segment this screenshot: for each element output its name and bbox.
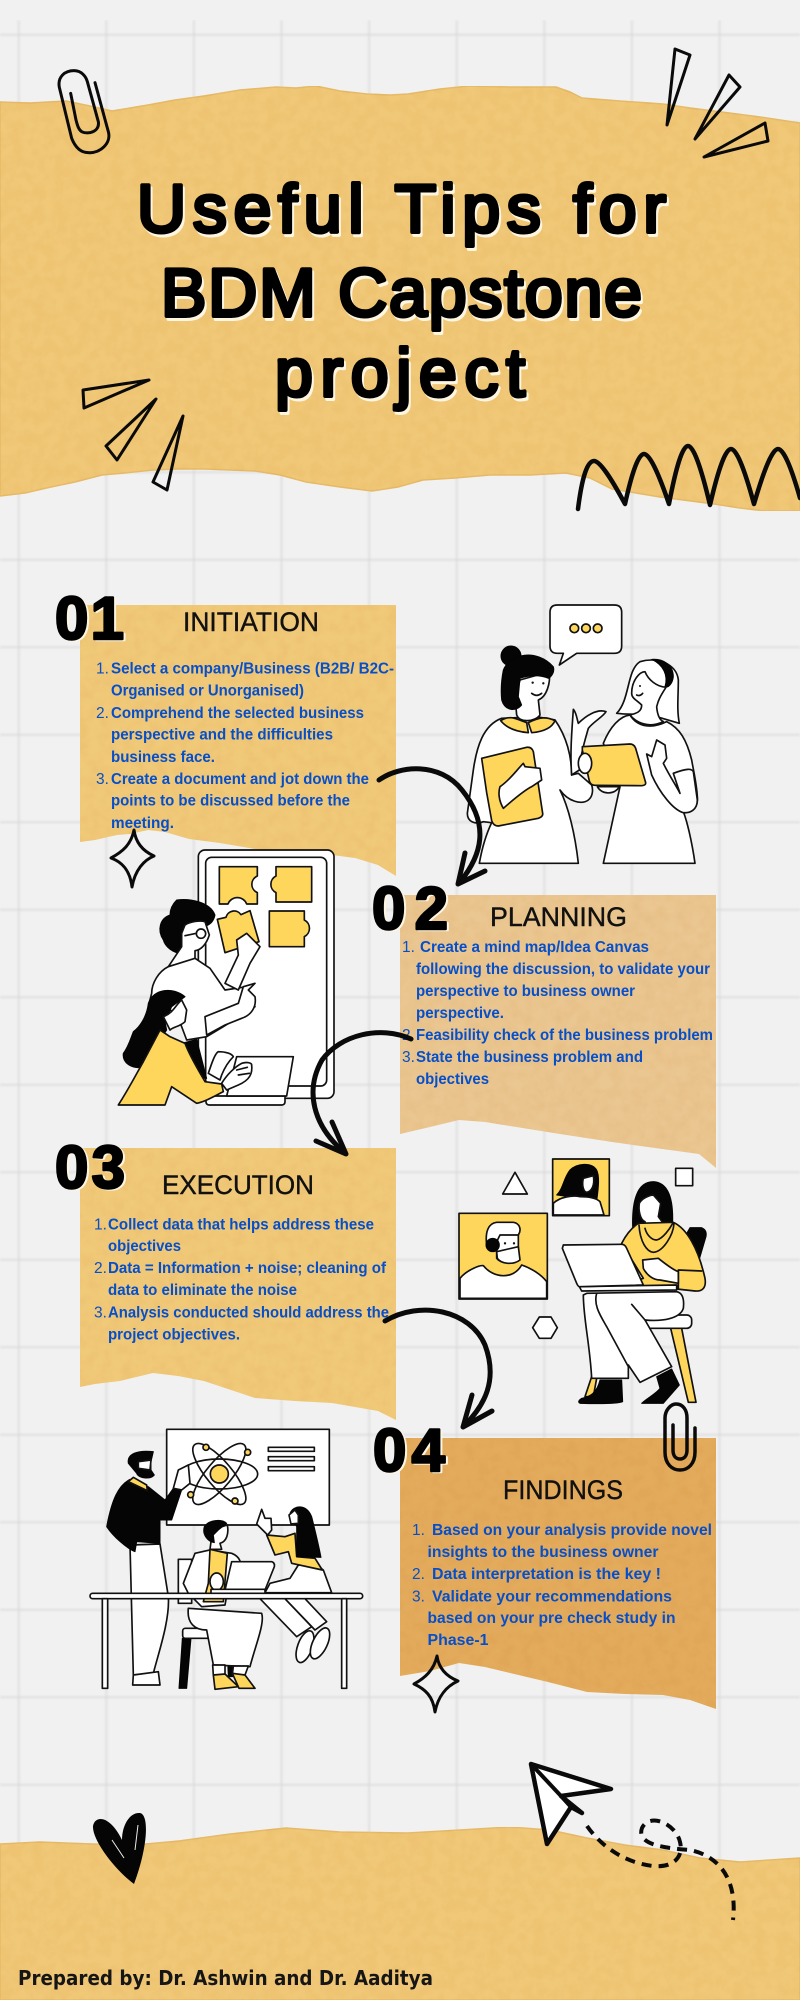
step list: findings: insights to the business owner bbox=[428, 1544, 658, 1561]
title: BDM Capstone bbox=[161, 255, 642, 331]
illustration: woman on video call bbox=[459, 1159, 706, 1404]
panel: 01 initiation bbox=[80, 605, 396, 876]
illustration: team solving puzzle board bbox=[118, 850, 334, 1105]
step list: execution: 2. bbox=[94, 1260, 107, 1277]
step list: execution: Collect data that helps address these bbox=[108, 1216, 374, 1233]
step list: initiation: 1. bbox=[96, 661, 109, 678]
top torn paper banner bbox=[0, 86, 800, 511]
step list: findings: based on your pre check study in bbox=[428, 1610, 676, 1627]
step list: initiation bbox=[96, 661, 394, 832]
step list: execution: 3. bbox=[94, 1304, 107, 1322]
step list: planning: 2. bbox=[402, 1027, 415, 1044]
icon: spikes left bbox=[83, 380, 183, 490]
step list: findings bbox=[412, 1522, 712, 1649]
step list: execution: 1. bbox=[94, 1216, 107, 1233]
step list: planning bbox=[402, 939, 713, 1088]
panel: 03 execution bbox=[80, 1148, 396, 1420]
step list: planning: perspective to business owner bbox=[416, 983, 635, 1000]
heading: initiation: INITIATION bbox=[183, 607, 319, 637]
arrow: initiation to planning bbox=[379, 769, 485, 884]
step list: execution: Analysis conducted should address the bbox=[108, 1304, 389, 1322]
step list: findings: 2. bbox=[412, 1566, 425, 1583]
panel: 02 planning bbox=[400, 895, 716, 1168]
step list: initiation: Comprehend the selected business bbox=[111, 705, 364, 722]
icon: spikes top right bbox=[667, 49, 768, 157]
icon: paper clip top left bbox=[59, 71, 109, 153]
step list: execution: project objectives. bbox=[108, 1326, 240, 1343]
step list: initiation: Create a document and jot down the bbox=[111, 771, 369, 788]
footer credit: Prepared by: Dr. Ashwin and Dr. Aaditya bbox=[18, 1966, 433, 1990]
step list: findings: 3. bbox=[412, 1588, 425, 1606]
step list: planning: 3. bbox=[402, 1049, 415, 1066]
number 02: 02 bbox=[372, 875, 448, 942]
title bbox=[137, 171, 666, 411]
step list: initiation: Organised or Unorganised) bbox=[111, 683, 304, 700]
step list: initiation: 3. bbox=[96, 771, 109, 788]
heading: planning: PLANNING bbox=[490, 902, 627, 932]
step list: execution: objectives bbox=[108, 1238, 181, 1255]
icon: zigzag squiggle bbox=[578, 446, 800, 509]
arrow: planning to execution bbox=[313, 1033, 411, 1154]
step list: findings: 1. bbox=[412, 1522, 425, 1539]
step list: execution: Data = Information + noise; cleaning of bbox=[108, 1260, 387, 1277]
step list: planning: Feasibility check of the business problem bbox=[416, 1027, 713, 1044]
icon: paper plane bbox=[531, 1764, 611, 1844]
number 03: 03 bbox=[55, 1134, 125, 1201]
number 01: 01 bbox=[55, 585, 124, 652]
step list: findings: Validate your recommendations bbox=[432, 1588, 672, 1606]
icon: dashed flight path bbox=[587, 1821, 734, 1920]
step list: findings: Phase-1 bbox=[428, 1632, 489, 1649]
step list: initiation: perspective and the difficulties bbox=[111, 727, 333, 744]
step list: planning: 1. bbox=[402, 939, 415, 956]
step list: findings: Based on your analysis provide novel bbox=[432, 1522, 712, 1539]
icon: sparkle lower bbox=[414, 1656, 458, 1712]
step list: initiation: meeting. bbox=[111, 815, 174, 832]
step list: initiation: 2. bbox=[96, 705, 109, 722]
title: project bbox=[275, 335, 525, 411]
step list: planning: perspective. bbox=[416, 1005, 504, 1022]
step list: planning: objectives bbox=[416, 1071, 489, 1088]
number 04: 04 bbox=[373, 1417, 446, 1484]
step list: planning: following the discussion, to validate your bbox=[416, 961, 710, 978]
icon: paper clip right bbox=[665, 1404, 695, 1470]
step list: initiation: points to be discussed before the bbox=[111, 793, 350, 810]
step list: execution bbox=[94, 1216, 389, 1343]
step list: findings: Data interpretation is the key ! bbox=[432, 1566, 661, 1583]
icon: sparkle bbox=[111, 830, 154, 887]
step list: initiation: business face. bbox=[111, 749, 215, 766]
illustration: two women talking bbox=[467, 605, 697, 863]
illustration: team at table with atom board bbox=[90, 1429, 363, 1689]
bottom torn paper banner bbox=[0, 1827, 800, 2000]
step list: planning: Create a mind map/Idea Canvas bbox=[420, 939, 649, 956]
title: Useful Tips for bbox=[137, 171, 666, 247]
heading: execution: EXECUTION bbox=[162, 1170, 314, 1200]
heading: findings: FINDINGS bbox=[503, 1475, 623, 1505]
arrow: execution to findings bbox=[385, 1310, 492, 1427]
step list: execution: data to eliminate the noise bbox=[108, 1282, 297, 1299]
step list: planning: State the business problem and bbox=[416, 1049, 643, 1066]
panel: 04 findings bbox=[400, 1438, 716, 1709]
icon: heart bbox=[93, 1813, 146, 1884]
step list: initiation: Select a company/Business (B2B/ B2C- bbox=[111, 661, 394, 678]
